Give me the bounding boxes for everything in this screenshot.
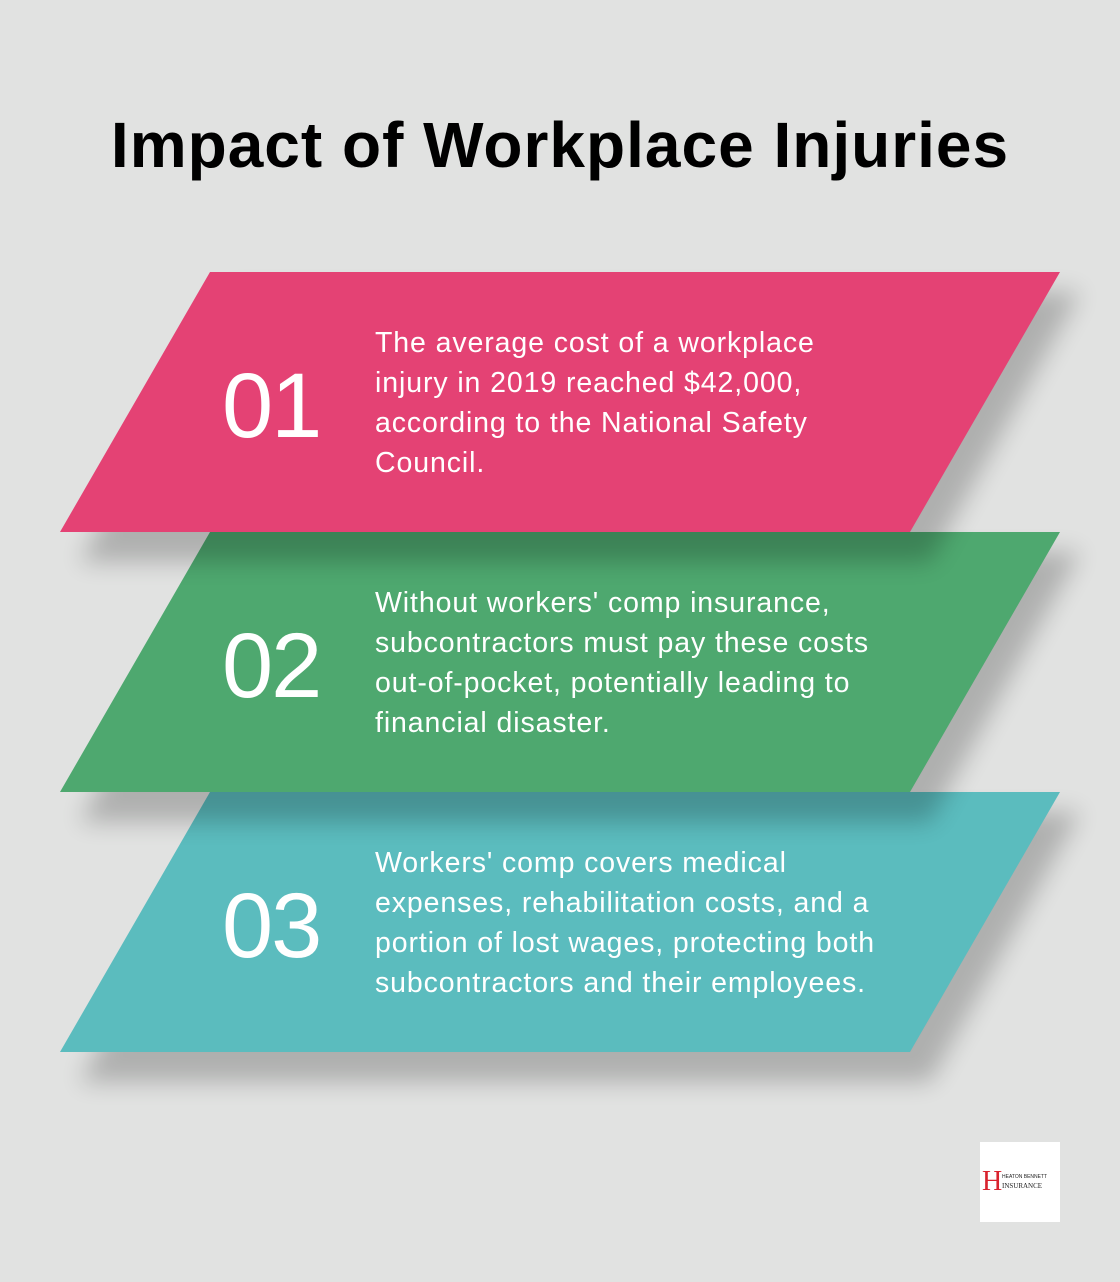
text 02: out-of-pocket, potentially leading to [375,667,850,699]
panel 1 [60,272,1080,562]
text 01: Council. [375,447,485,479]
text 02: Without workers' comp insurance, [375,587,831,619]
text 02: subcontractors must pay these costs [375,627,869,659]
panel 2 [60,532,1080,822]
title: Impact of Workplace Injuries [111,109,1009,181]
text 03: subcontractors and their employees. [375,967,866,999]
number 02: 02 [222,615,320,717]
text 01: injury in 2019 reached $42,000, [375,367,802,399]
panel 3 [60,792,1080,1082]
text 03: expenses, rehabilitation costs, and a [375,887,869,919]
logo: INSURANCE [1002,1182,1042,1190]
number 01: 01 [222,355,320,457]
text 02: financial disaster. [375,707,611,739]
logo: H [982,1166,1002,1197]
text 02 [375,587,869,739]
text 01: The average cost of a workplace [375,327,815,359]
text 03 [375,847,875,999]
logo: HEATON BENNETT [1002,1174,1047,1180]
logo [980,1142,1060,1222]
text 01: according to the National Safety [375,407,808,439]
text 01 [375,327,815,479]
number 03: 03 [222,875,320,977]
text 03: Workers' comp covers medical [375,847,787,879]
text 03: portion of lost wages, protecting both [375,927,875,959]
